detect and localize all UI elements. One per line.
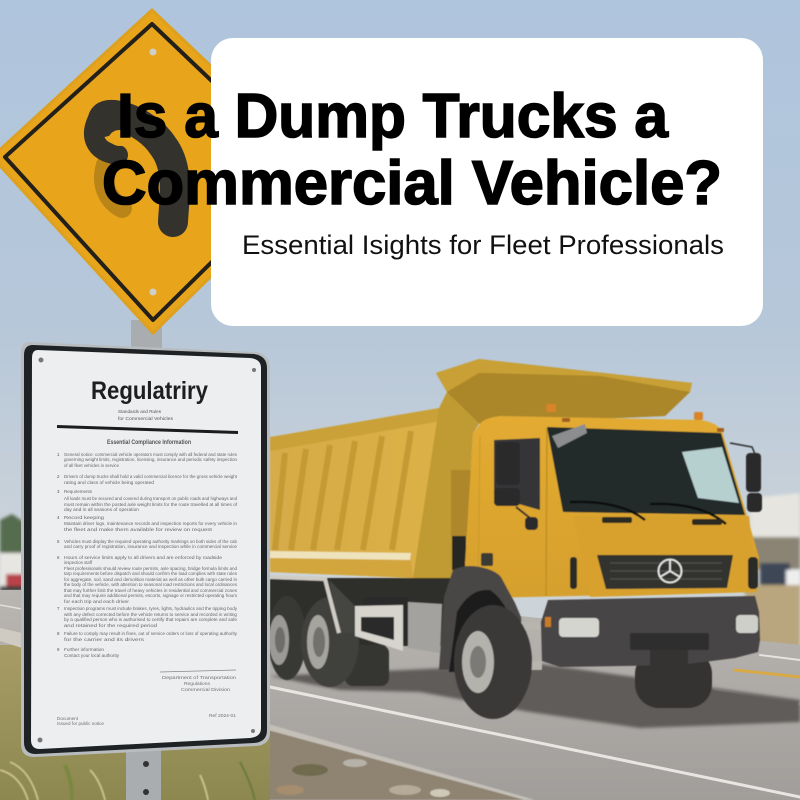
windshield <box>547 427 745 524</box>
white stripe <box>270 551 411 560</box>
front wheel arch <box>439 566 525 672</box>
top mirror <box>552 424 587 448</box>
paragraph numbers: 6 <box>57 555 60 560</box>
regulatory notice board <box>21 342 270 757</box>
rear fender <box>329 580 355 633</box>
background: roadside scenery <box>0 493 800 650</box>
signature block: Ref 2024-01 <box>209 713 237 718</box>
board numbered paragraphs: Hours of service limits apply to all drivers and are enforced by roadside <box>64 555 223 560</box>
amber roof lights <box>546 404 724 432</box>
signature block: Document <box>57 716 79 721</box>
paragraph numbers: 2 <box>57 474 60 479</box>
board numbered paragraphs: for each trip and each driver <box>64 599 130 604</box>
paragraph numbers <box>57 452 60 652</box>
paragraph numbers: 1 <box>57 452 60 457</box>
board numbered paragraphs: for the carrier and its drivers <box>64 637 145 642</box>
board rule <box>57 425 238 434</box>
board numbered paragraphs: tarp requirements before dispatch and should confirm the load complies with state rules <box>64 571 238 576</box>
dump canopy <box>436 359 692 424</box>
dump headboard <box>413 392 480 578</box>
board numbered paragraphs: must remain within the posted axle weight limits for the route travelled at all times of <box>64 502 238 507</box>
icon: curved road symbol <box>94 115 175 222</box>
board subheading: for Commercial Vehicles <box>118 416 174 421</box>
board numbered paragraphs: Failure to comply may result in fines, out of service orders or loss of operating authority <box>64 631 238 636</box>
board numbered paragraphs: inspection staff <box>64 560 93 565</box>
board numbered paragraphs: Requirements <box>64 489 93 494</box>
sign bolts <box>150 48 156 56</box>
board section heading: Essential Compliance Information <box>107 440 191 446</box>
right headlight <box>736 615 758 633</box>
board numbered paragraphs: with any defect corrected before the vehicle returns to service and recorded in writing <box>64 612 238 617</box>
cab steps <box>512 622 542 670</box>
signature block: Regulations <box>184 681 211 686</box>
road line markings <box>0 605 800 797</box>
board numbered paragraphs: day and in all seasons of operation <box>64 507 140 512</box>
signature block: Department of Transportation <box>162 675 237 680</box>
subtitle: Essential Isights for Fleet Professionals <box>242 230 724 260</box>
title: Is a Dump Trucks a <box>117 82 668 151</box>
board numbered paragraphs: governing weight limits, registration, licensing, insurance and periodic safety inspection <box>64 457 238 462</box>
diamond warning sign <box>0 10 320 333</box>
board numbered paragraphs: Fleet professionals should review route permits, axle spacing, bridge formula limits and <box>64 566 238 571</box>
board numbered paragraphs: Maintain driver logs, maintenance records and inspection reports for every vehicle in <box>64 521 238 526</box>
board subheading: Standards and Rules <box>118 409 162 414</box>
signature block: Issued for public notice <box>57 721 105 726</box>
board numbered paragraphs: the fleet and make them available for review on request <box>64 527 213 532</box>
board numbered paragraphs: Vehicles must display the required operating authority markings on both sides of the cab <box>64 539 238 544</box>
chassis <box>270 578 460 646</box>
board numbered paragraphs: by a qualified person who is authorised to certify that repairs are complete and safe <box>64 617 238 622</box>
board numbered paragraphs: and retained for the required period <box>64 623 158 628</box>
signature block <box>57 670 237 726</box>
paragraph numbers: 3 <box>57 489 60 494</box>
side window <box>494 438 540 510</box>
paragraph numbers: 9 <box>57 647 60 652</box>
left headlight <box>545 617 599 637</box>
board numbered paragraphs: Drivers of dump trucks shall hold a valid commercial licence for the gross vehicle weight <box>64 474 238 479</box>
board subheading <box>118 409 174 421</box>
board numbered paragraphs: Contact your local authority <box>64 653 120 658</box>
rear wheel 1 <box>268 596 306 680</box>
fuel tank and step frame <box>355 597 442 653</box>
paragraph numbers: 5 <box>57 539 60 544</box>
board numbered paragraphs <box>64 452 238 658</box>
roadside dirt verge with debris <box>268 724 535 800</box>
board numbered paragraphs: Further information <box>64 647 105 652</box>
rear wheel 2 <box>301 597 389 687</box>
front bumper <box>541 596 760 669</box>
board numbered paragraphs: of all fleet vehicles in service <box>64 463 120 468</box>
dump body side <box>270 408 441 578</box>
title <box>102 82 722 218</box>
grille <box>570 555 758 589</box>
white title panel <box>211 38 763 326</box>
sign post upper <box>131 320 162 350</box>
board numbered paragraphs: for aggregate, soil, sand and demolition material as well as other bulk cargo carried in <box>64 577 238 582</box>
board numbered paragraphs: All loads must be secured and covered during transport on public roads and highways and <box>64 496 238 501</box>
board numbered paragraphs: rating and class of vehicle being operated <box>64 480 155 485</box>
board numbered paragraphs: General notice: commercial vehicle operators must comply with all federal and state rules <box>64 452 238 457</box>
board numbered paragraphs: and carry proof of registration, insurance and inspection while in commercial service <box>64 544 238 549</box>
wipers <box>570 502 726 524</box>
board numbered paragraphs: that may further limit the travel of heavy vehicles in residential and commercial zones <box>64 588 238 593</box>
star emblem <box>658 560 682 582</box>
grass verge <box>0 645 270 800</box>
sign post lower <box>126 750 161 800</box>
title: Commercial Vehicle? <box>102 149 722 218</box>
paragraph numbers: 4 <box>57 515 60 520</box>
dump truck <box>268 359 762 719</box>
paragraph numbers: 7 <box>57 606 60 611</box>
front wheel <box>454 605 532 719</box>
board numbered paragraphs: the body of the vehicle, with attention to seasonal road restrictions and local ordinances <box>64 582 238 587</box>
board heading: Regulatriry <box>91 377 208 405</box>
board numbered paragraphs: Inspection programs must include brakes, tyres, lights, hydraulics and the tipping body <box>64 606 238 611</box>
door handle <box>481 553 493 566</box>
paragraph numbers: 8 <box>57 631 60 636</box>
cab vents under windshield <box>602 517 722 525</box>
signature block: Commercial Division <box>181 687 231 692</box>
rib lines <box>275 431 411 550</box>
truck shadow <box>270 664 800 728</box>
left mirrors <box>494 442 538 530</box>
side rail <box>270 577 339 633</box>
right mirrors <box>730 443 762 512</box>
road <box>0 590 800 800</box>
board bolts <box>38 358 256 742</box>
board numbered paragraphs: and that may require additional permits, escorts, signage or restricted operating hours <box>64 593 238 598</box>
board numbered paragraphs: Record keeping <box>64 515 105 520</box>
curb <box>0 628 22 648</box>
cab body <box>465 416 759 598</box>
front right tyre <box>635 650 712 708</box>
